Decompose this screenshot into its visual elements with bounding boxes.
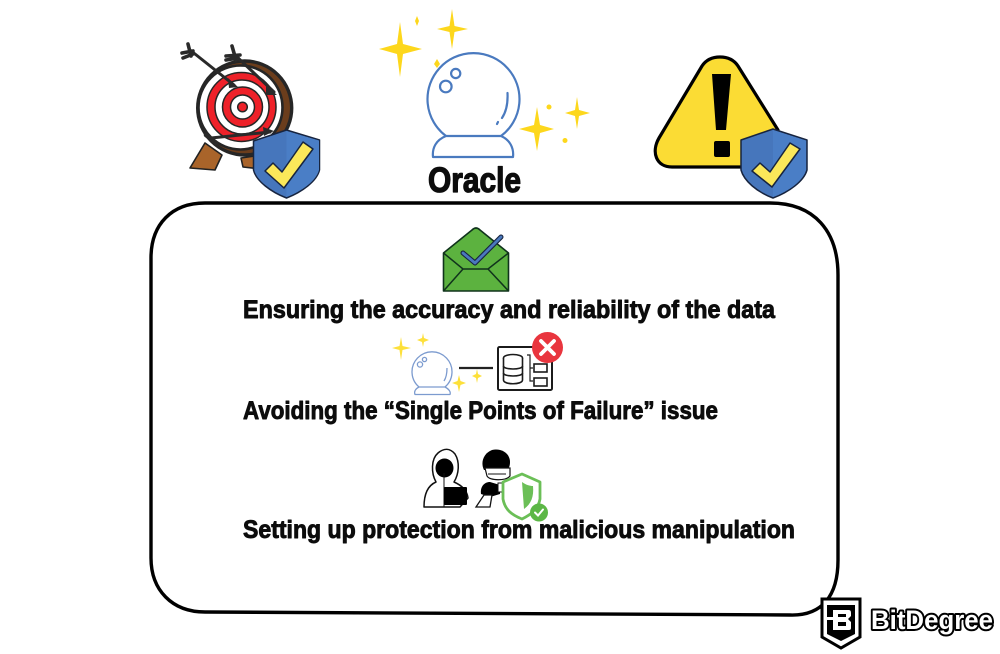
sparkles xyxy=(379,9,590,151)
icon: hacker and protected user xyxy=(424,449,548,522)
warning triangle xyxy=(655,57,778,167)
logo wordmark: BitDegree xyxy=(871,605,993,635)
database panel xyxy=(498,347,552,390)
crystal ball xyxy=(428,53,520,157)
text: accuracy and reliability: Ensuring the accuracy and reliability of the data xyxy=(243,296,776,324)
logo: BitDegree xyxy=(822,599,993,648)
target rings xyxy=(198,61,292,155)
small crystal ball xyxy=(412,352,452,394)
shield with check xyxy=(254,130,320,198)
masked person xyxy=(476,450,510,507)
icon: crystal ball with sparkles xyxy=(379,9,590,157)
target stand xyxy=(190,143,262,170)
connector line xyxy=(459,367,493,369)
icon: oracle linked to failing database xyxy=(392,332,563,394)
panel: rounded content box xyxy=(151,203,838,615)
green shield badge xyxy=(503,474,548,522)
arrows xyxy=(182,44,274,143)
exclamation mark xyxy=(712,74,731,157)
error badge xyxy=(532,332,563,363)
small sparkles xyxy=(392,333,482,392)
icon: warning triangle with shield xyxy=(655,57,807,198)
text: single points of failure: Avoiding the “Single Points of Failure” issue xyxy=(243,397,718,425)
icon: green envelope with check xyxy=(444,228,508,291)
icon: target with arrows and shield xyxy=(182,44,320,198)
shield with check xyxy=(741,129,807,198)
hacker xyxy=(424,449,468,507)
heading: Oracle: Oracle xyxy=(428,161,521,200)
text: malicious manipulation: Setting up protection from malicious manipulation xyxy=(243,516,795,544)
logo shield xyxy=(822,599,860,648)
